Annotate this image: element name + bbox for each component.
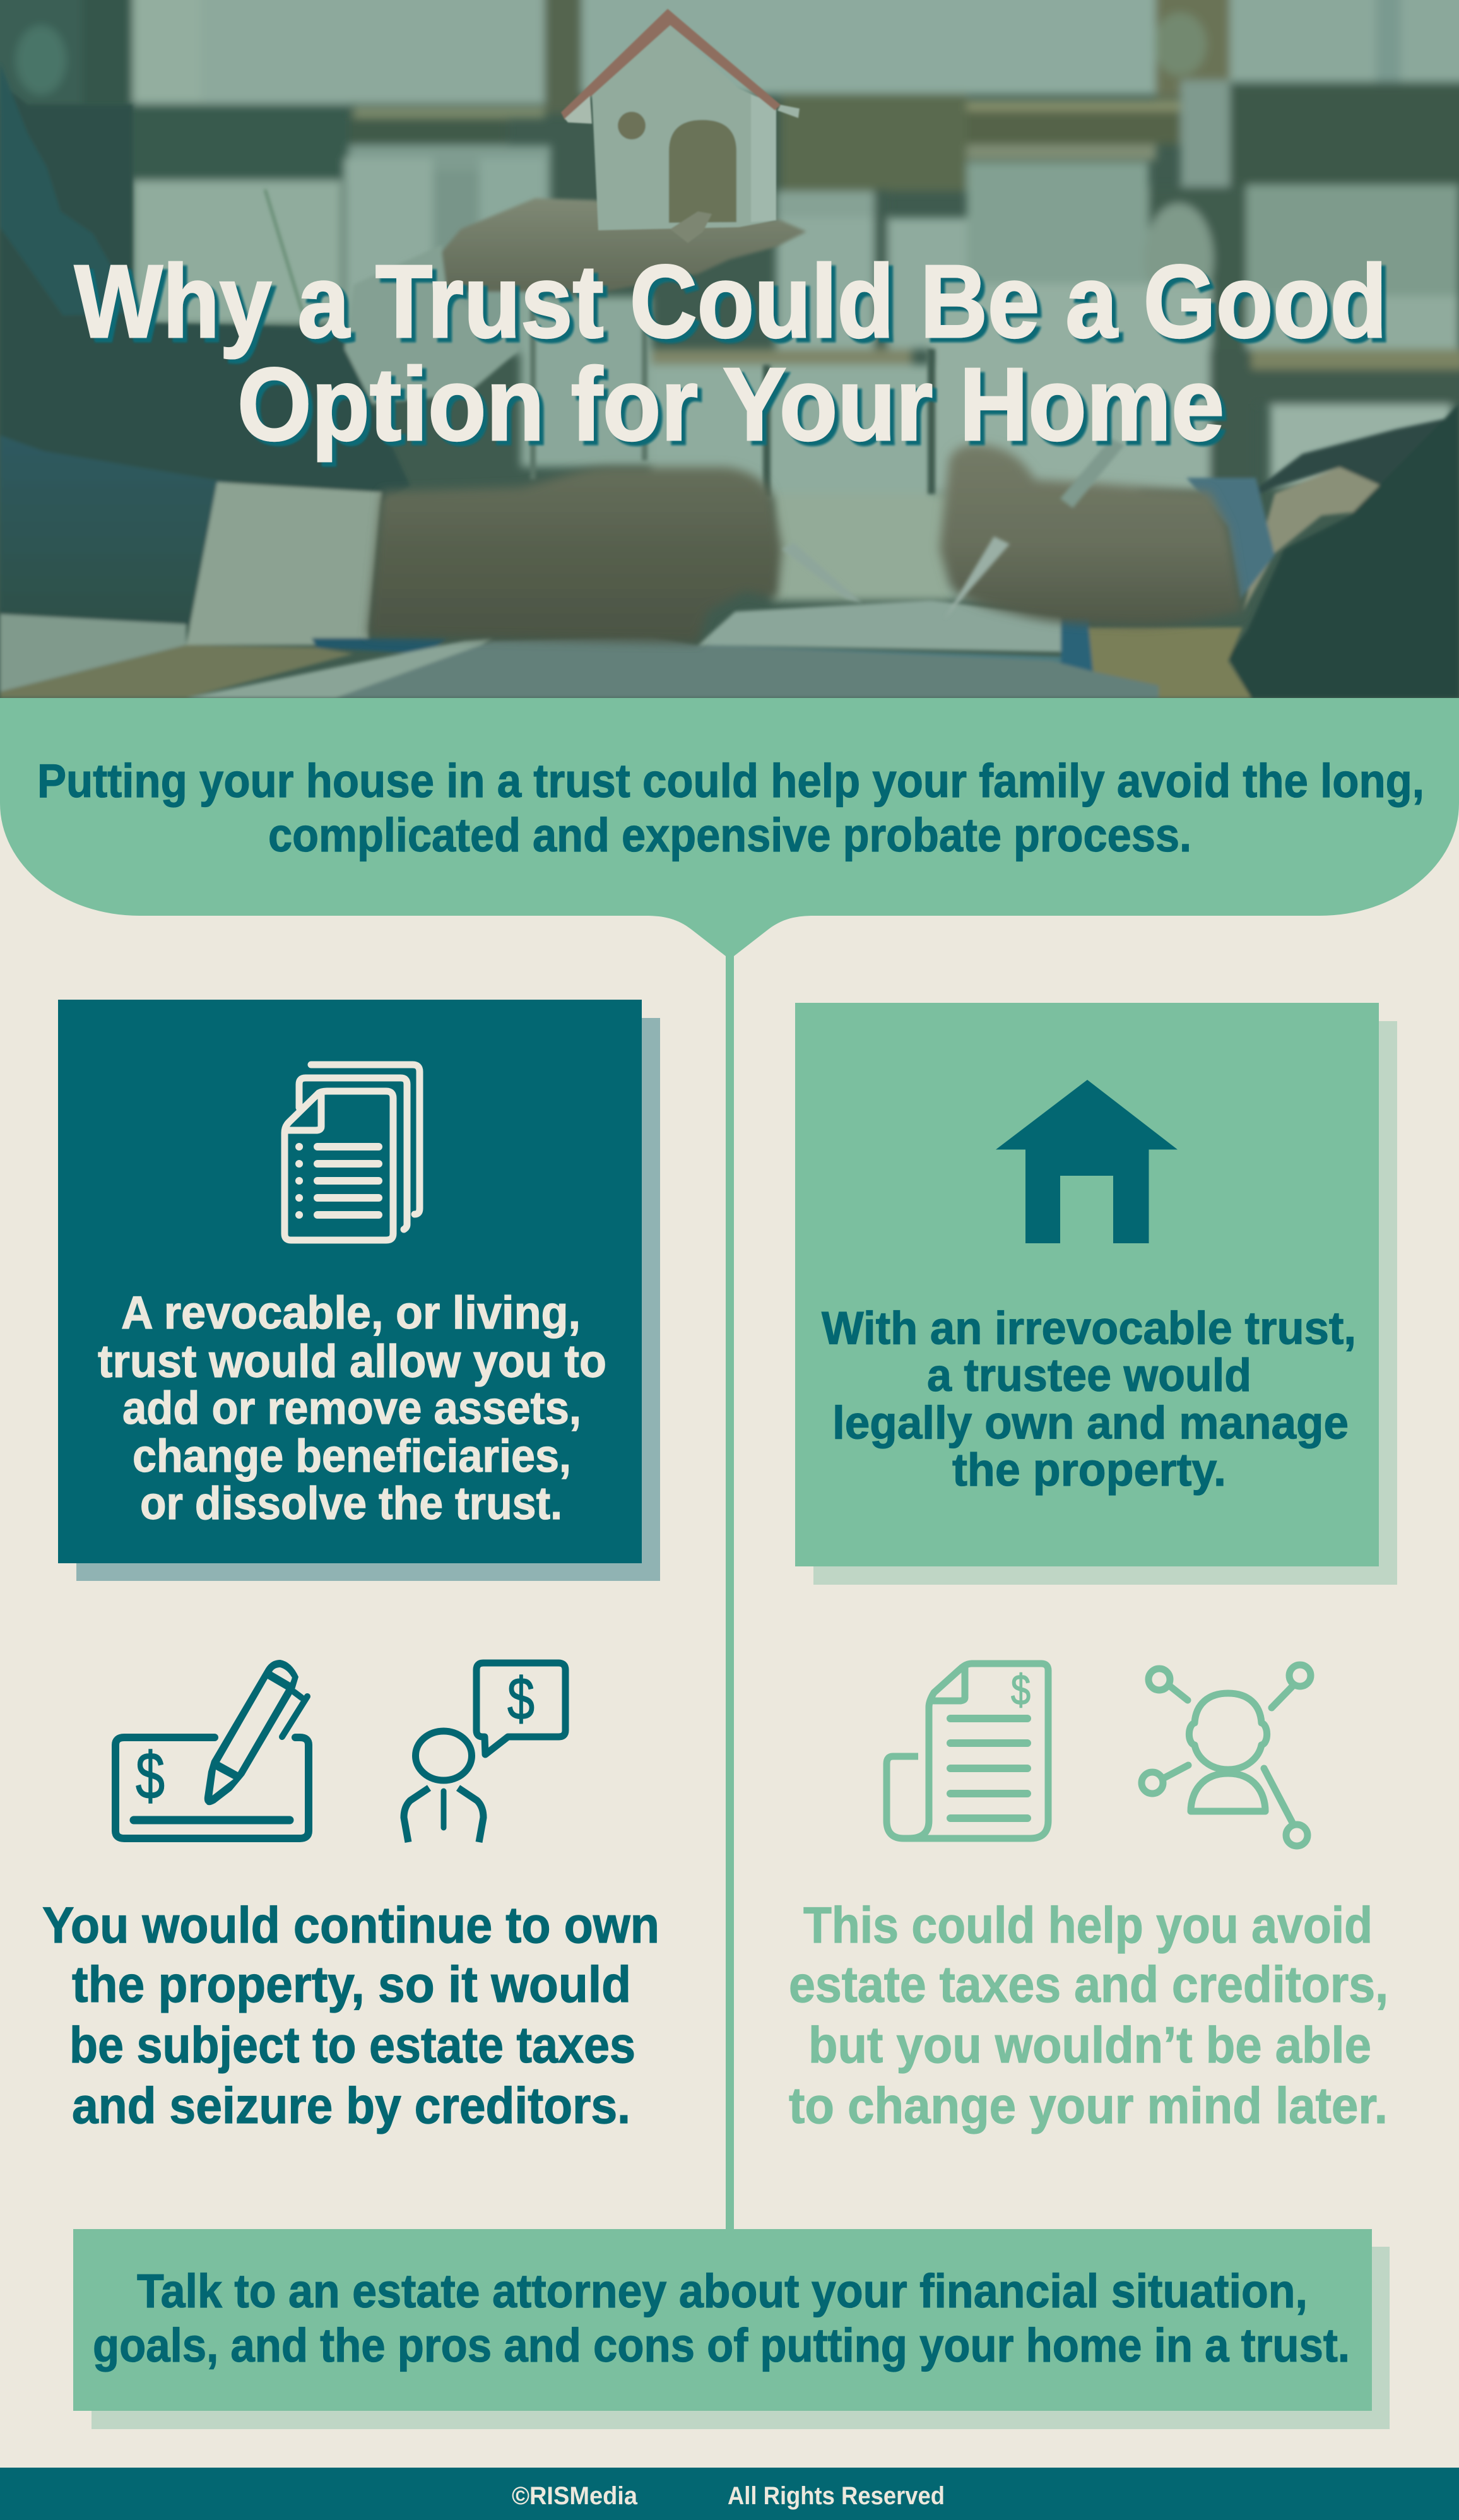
irrevocable trust text: a trustee would bbox=[927, 1350, 1251, 1401]
text: revocable trust drawback: be subject to estate taxes bbox=[69, 2017, 635, 2074]
icon: tax document scroll: $ bbox=[1011, 1666, 1031, 1714]
title: Option for Your Home bbox=[237, 346, 1224, 462]
icon: stack of documents bbox=[285, 1065, 420, 1240]
irrevocable trust text: the property. bbox=[952, 1445, 1226, 1496]
panel: irrevocable trust bbox=[795, 1003, 1397, 1585]
irrevocable trust text: legally own and manage bbox=[832, 1397, 1349, 1449]
text: revocable trust drawback: the property, so it would bbox=[72, 1956, 631, 2013]
text: revocable trust drawback: and seizure by creditors. bbox=[72, 2078, 630, 2134]
text: revocable trust drawback: You would continue to own bbox=[42, 1897, 659, 1954]
text: irrevocable trust drawback: to change your mind later. bbox=[789, 2078, 1388, 2134]
revocable trust text: trust would allow you to bbox=[98, 1336, 606, 1387]
title bbox=[74, 244, 1387, 462]
revocable trust text: or dissolve the trust. bbox=[140, 1478, 562, 1529]
icon: person with network nodes bbox=[1142, 1665, 1311, 1846]
intro speech banner bbox=[0, 698, 1459, 967]
rights text: All Rights Reserved bbox=[728, 2482, 945, 2510]
hands bbox=[367, 444, 1243, 643]
irrevocable trust text bbox=[822, 1303, 1356, 1496]
icon: check and pen: $ bbox=[136, 1739, 165, 1813]
text: irrevocable trust drawback: but you wouldn’t be able bbox=[808, 2017, 1371, 2074]
footer bbox=[0, 2468, 1459, 2520]
copyright text: ©RISMedia bbox=[512, 2482, 638, 2510]
irrevocable trust text: With an irrevocable trust, bbox=[822, 1303, 1356, 1354]
text: irrevocable trust drawback: estate taxes and creditors, bbox=[789, 1956, 1388, 2013]
call to action text: goals, and the pros and cons of putting your home in a trust. bbox=[93, 2319, 1350, 2372]
hero photo: hands exchanging a model house over a signed contract bbox=[0, 0, 1459, 698]
panel: revocable trust bbox=[58, 1000, 660, 1581]
intro text bbox=[37, 754, 1424, 861]
call to action text: Talk to an estate attorney about your financial situation, bbox=[137, 2264, 1308, 2317]
text: revocable trust drawback bbox=[42, 1897, 659, 2134]
center divider line bbox=[726, 956, 734, 2231]
icon: person with money speech bubble: $ bbox=[507, 1665, 535, 1732]
revocable trust text: A revocable, or living, bbox=[121, 1287, 581, 1339]
icon: tax document scroll bbox=[887, 1664, 1048, 1838]
revocable trust text: add or remove assets, bbox=[122, 1383, 581, 1434]
icon: house bbox=[996, 1080, 1178, 1243]
icon: person with money speech bubble bbox=[404, 1663, 565, 1842]
icon: check and pen bbox=[115, 1660, 309, 1838]
call to action text bbox=[93, 2264, 1350, 2372]
revocable trust text: change beneficiaries, bbox=[133, 1431, 571, 1482]
text: irrevocable trust drawback: This could help you avoid bbox=[803, 1897, 1373, 1954]
panel: call to action bbox=[73, 2229, 1390, 2429]
intro text: complicated and expensive probate process. bbox=[268, 808, 1191, 861]
revocable trust text bbox=[98, 1287, 606, 1529]
text: irrevocable trust drawback bbox=[789, 1897, 1388, 2134]
